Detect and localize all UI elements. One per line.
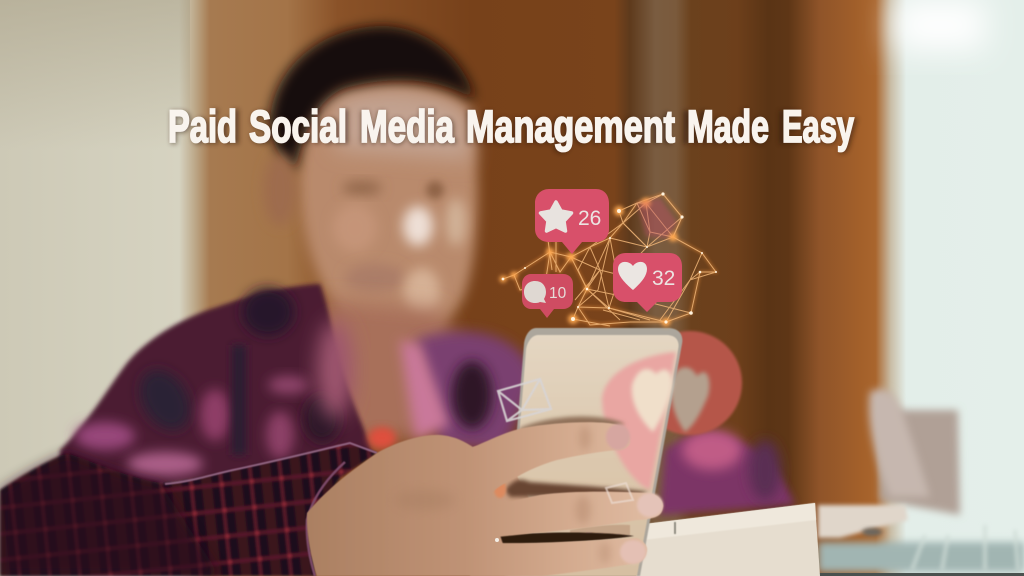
faint mail icon on finger (606, 483, 633, 503)
orange reflection (494, 480, 506, 498)
index finger (470, 422, 630, 500)
beige sliver and dark gap below middle finger (570, 525, 630, 535)
pink hexagon glow in network (637, 198, 677, 238)
icon: speech bubble (524, 281, 546, 303)
shadow above index finger (520, 416, 625, 432)
title: Management (466, 101, 675, 152)
shadow below index finger (505, 480, 648, 497)
network of glowing orange lines (500, 192, 717, 326)
sleeve cuff (0, 443, 377, 576)
ring finger (470, 538, 647, 576)
badge: comment 10 (522, 274, 573, 318)
title: Social (249, 101, 347, 152)
pink notification circle on screen (602, 352, 676, 490)
title: Media (360, 101, 455, 152)
open notebook in foreground (636, 503, 820, 576)
fingernails (606, 424, 630, 450)
smartphone (505, 328, 682, 576)
count 32: 32 (652, 267, 675, 290)
count 10: 10 (549, 285, 567, 302)
blurred man: head, hair and neck (264, 26, 478, 440)
knuckle shading (575, 496, 591, 524)
count 26: 26 (578, 207, 601, 230)
badge: heart 32 (613, 253, 682, 312)
icon: heart (618, 262, 647, 290)
red circle with heart behind phone (638, 331, 742, 435)
palm and fingers (307, 416, 663, 576)
hand holding phone (0, 416, 663, 576)
badge: star 26 (535, 189, 609, 254)
icon: floating mail envelope (498, 379, 551, 421)
blurred plaid shirt (60, 284, 795, 515)
title: Made (687, 101, 769, 152)
mug, paper and laptop on the table (818, 389, 1024, 576)
icon: star (540, 202, 572, 231)
ring highlight (495, 538, 499, 542)
title: Easy (782, 101, 854, 152)
middle finger (470, 492, 663, 540)
title: Paid (168, 101, 237, 152)
